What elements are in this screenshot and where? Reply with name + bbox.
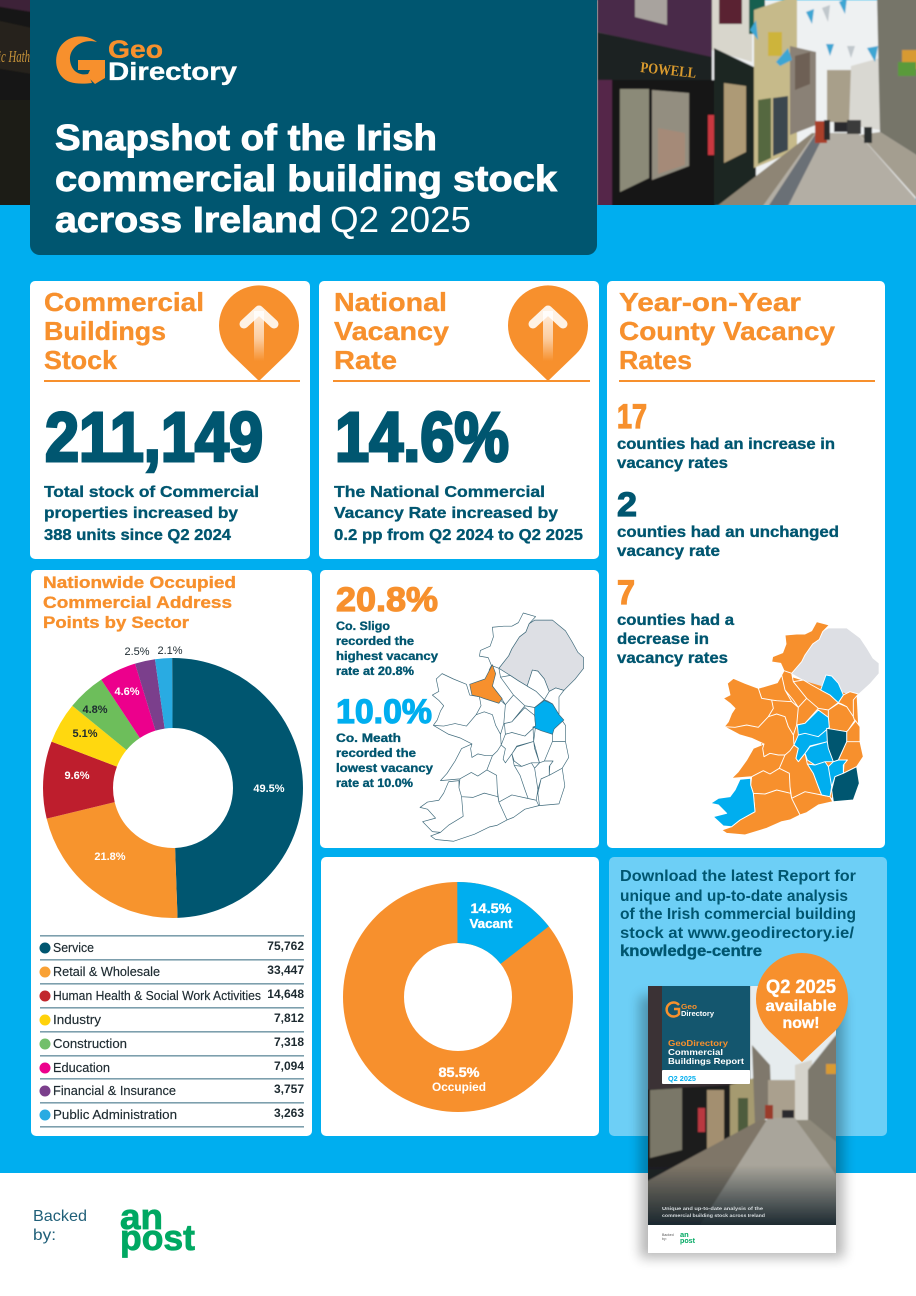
logo: GeoDirectory: Geo	[108, 36, 163, 64]
vacancy description: 0.2 pp from Q2 2024 to Q2 2025	[334, 527, 583, 544]
row: financial: 3,757	[274, 1082, 304, 1096]
panel: highest and lowest vacancy	[320, 570, 599, 848]
heading: Rate	[334, 345, 397, 375]
donut chart: sectors: 2.1%	[157, 645, 183, 657]
row: industry: Industry	[53, 1013, 102, 1027]
vacancy description: Vacancy Rate increased by	[334, 505, 558, 522]
icon: up arrow pin	[508, 285, 588, 381]
panel: commercial buildings stock	[30, 281, 310, 559]
row: financial	[40, 1082, 304, 1098]
stock description	[44, 484, 259, 544]
cover title panel: Geo	[681, 1004, 697, 1011]
cover title panel: Commercial	[668, 1047, 723, 1057]
cover strapline: Unique and up-to-date analysis of the	[662, 1206, 764, 1211]
logo: an post	[120, 1196, 195, 1258]
stock description: Total stock of Commercial	[44, 484, 259, 501]
download text: knowledge-centre	[620, 943, 762, 960]
row: industry: 7,812	[274, 1011, 304, 1025]
row: construction: Construction	[53, 1037, 127, 1051]
logo: GeoDirectory	[56, 36, 237, 86]
stat: lowest vacancy: lowest vacancy	[336, 761, 433, 775]
stat: lowest vacancy: Co. Meath	[336, 731, 401, 745]
row: education: Education	[53, 1061, 110, 1075]
stat: 2 counties: 2	[617, 486, 637, 524]
title	[55, 117, 558, 240]
heading: Commercial	[44, 287, 204, 317]
stat: lowest vacancy: 10.0%	[336, 693, 432, 731]
shop sign lettering in photo	[0, 47, 697, 82]
stat: 7 counties: 7	[617, 574, 635, 612]
donut chart: occupied vs vacant: Vacant	[470, 917, 513, 931]
footer band	[0, 1173, 916, 1296]
stat: 17 counties	[617, 398, 835, 472]
logo: an post: an	[120, 1196, 163, 1237]
donut chart: occupied vs vacant: 85.5%	[438, 1065, 480, 1080]
donut chart: sectors: 4.6%	[114, 686, 140, 698]
report cover	[640, 980, 844, 1258]
cover title panel: Q2 2025	[668, 1076, 696, 1083]
donut chart: sectors: 4.8%	[82, 704, 108, 716]
cover backer: Backed	[662, 1233, 674, 1237]
heading: Rates	[619, 345, 692, 375]
stat: 7 counties	[617, 574, 734, 667]
heading: Stock	[44, 345, 118, 375]
title: commercial building stock	[55, 158, 558, 199]
row: construction: 7,318	[274, 1035, 304, 1049]
cover title panel: Buildings Report	[668, 1056, 744, 1066]
callout pin: available now: now!	[782, 1015, 820, 1032]
heading: County Vacancy	[619, 316, 836, 346]
cover backer: post	[680, 1236, 695, 1245]
row: retail: 33,447	[267, 963, 304, 977]
header panel	[30, 0, 597, 255]
stat: 7 counties: vacancy rates	[617, 650, 728, 667]
donut chart: occupied vs vacant: 14.5%	[470, 901, 512, 916]
donut chart: sectors: 21.8%	[94, 851, 126, 863]
heading: National	[334, 287, 447, 317]
title: Snapshot of the Irish	[55, 117, 437, 158]
callout pin: available now: Q2 2025	[766, 977, 836, 998]
stock description: 388 units since Q2 2024	[44, 527, 231, 544]
vacancy description	[334, 484, 583, 544]
map: county vacancy change	[711, 622, 879, 835]
donut chart: sectors: 5.1%	[72, 728, 98, 740]
heading: Nationwide Occupied	[43, 573, 236, 592]
heading: Buildings	[44, 316, 166, 346]
title: Q2 2025	[330, 199, 471, 240]
vacancy figure: 14.6%	[335, 398, 509, 476]
cover title panel: GeoDirectory	[668, 1038, 728, 1048]
download text: stock at www.geodirectory.ie/	[620, 925, 855, 942]
heading	[334, 287, 450, 375]
stat: highest vacancy: 20.8%	[336, 581, 438, 619]
row: service: Service	[53, 941, 94, 955]
donut chart: sectors: 49.5%	[253, 783, 285, 795]
stat: highest vacancy: recorded the	[336, 634, 414, 648]
heading: Vacancy	[334, 316, 450, 346]
vacancy description: The National Commercial	[334, 484, 545, 501]
stat: lowest vacancy	[336, 693, 433, 790]
donut chart: occupied vs vacant	[374, 901, 542, 1094]
stat: 17 counties: 17	[617, 398, 647, 436]
row: public administration	[40, 1106, 304, 1122]
row: health: 14,648	[267, 987, 304, 1001]
heading: Year-on-Year	[619, 287, 801, 317]
stat: highest vacancy	[336, 581, 438, 678]
panel: download the report	[609, 857, 887, 1136]
stat: highest vacancy: rate at 20.8%	[336, 664, 414, 678]
logo: an post: post	[120, 1217, 195, 1258]
stat: lowest vacancy: rate at 10.0%	[336, 776, 413, 790]
stat: 2 counties: counties had an unchanged	[617, 524, 839, 541]
stat: 7 counties: decrease in	[617, 631, 709, 648]
stat: 17 counties: vacancy rates	[617, 455, 728, 472]
download text: unique and up-to-date analysis	[620, 888, 848, 905]
row: financial: Financial & Insurance	[53, 1084, 176, 1098]
cover backer: an	[680, 1230, 689, 1239]
donut chart: occupied vs vacant: Occupied	[432, 1080, 486, 1094]
panel: occupancy donut	[321, 857, 599, 1136]
heading: Commercial Address	[43, 593, 232, 612]
heading: Points by Sector	[43, 613, 189, 632]
row: education: 7,094	[274, 1059, 304, 1073]
shop sign lettering in photo: POWELL	[640, 60, 697, 82]
stat: highest vacancy: Co. Sligo	[336, 619, 390, 633]
row: service	[40, 939, 304, 955]
map: highest and lowest counties	[420, 613, 584, 841]
row: construction	[40, 1035, 304, 1051]
stat: 17 counties: counties had an increase in	[617, 436, 835, 453]
stock description: properties increased by	[44, 505, 238, 522]
callout pin: available now	[756, 953, 848, 1062]
panel: year-on-year county vacancy rates	[607, 281, 885, 848]
stat: 2 counties: vacancy rate	[617, 543, 720, 560]
logo: GeoDirectory: Directory	[108, 58, 237, 86]
donut chart: sectors: 2.5%	[124, 646, 150, 658]
cover photo	[648, 986, 836, 1225]
stat: 2 counties	[617, 486, 839, 560]
icon: up arrow pin	[219, 285, 299, 381]
download text: Download the latest Report for	[620, 868, 856, 885]
cover backer	[662, 1230, 695, 1245]
row: retail: Retail & Wholesale	[53, 965, 160, 979]
callout pin: available now: available	[766, 998, 837, 1015]
row: public administration: Public Administration	[53, 1108, 177, 1122]
cover backer: by:	[662, 1237, 667, 1241]
title: across Ireland	[55, 199, 322, 240]
cover title panel	[662, 986, 750, 1084]
header street photo	[0, 0, 916, 210]
donut chart: sectors	[64, 645, 285, 883]
stat: highest vacancy: highest vacancy	[336, 649, 438, 663]
heading	[44, 287, 204, 375]
row: retail	[40, 963, 304, 979]
backed by label: by:	[33, 1227, 56, 1244]
donut chart: sectors: 9.6%	[64, 770, 90, 782]
row: industry	[40, 1011, 304, 1027]
heading	[43, 573, 236, 632]
cover strapline: commercial building stock across Ireland	[662, 1213, 765, 1218]
backed by label	[33, 1208, 87, 1244]
panel: national vacancy rate	[319, 281, 599, 559]
row: public administration: 3,263	[274, 1106, 304, 1120]
cover title panel: Directory	[681, 1011, 714, 1018]
backed by label: Backed	[33, 1208, 87, 1225]
heading	[619, 287, 836, 375]
cover strapline	[662, 1206, 765, 1218]
row: service: 75,762	[267, 939, 304, 953]
stock figure: 211,149	[45, 398, 263, 476]
stat: lowest vacancy: recorded the	[336, 746, 416, 760]
row: education	[40, 1059, 304, 1075]
panel: occupied address points by sector	[31, 570, 312, 1136]
row: health: Human Health & Social Work Activities	[53, 989, 261, 1003]
download text	[620, 868, 856, 960]
sector table	[40, 935, 304, 1128]
download text: of the Irish commercial building	[620, 906, 856, 923]
stat: 7 counties: counties had a	[617, 612, 734, 629]
